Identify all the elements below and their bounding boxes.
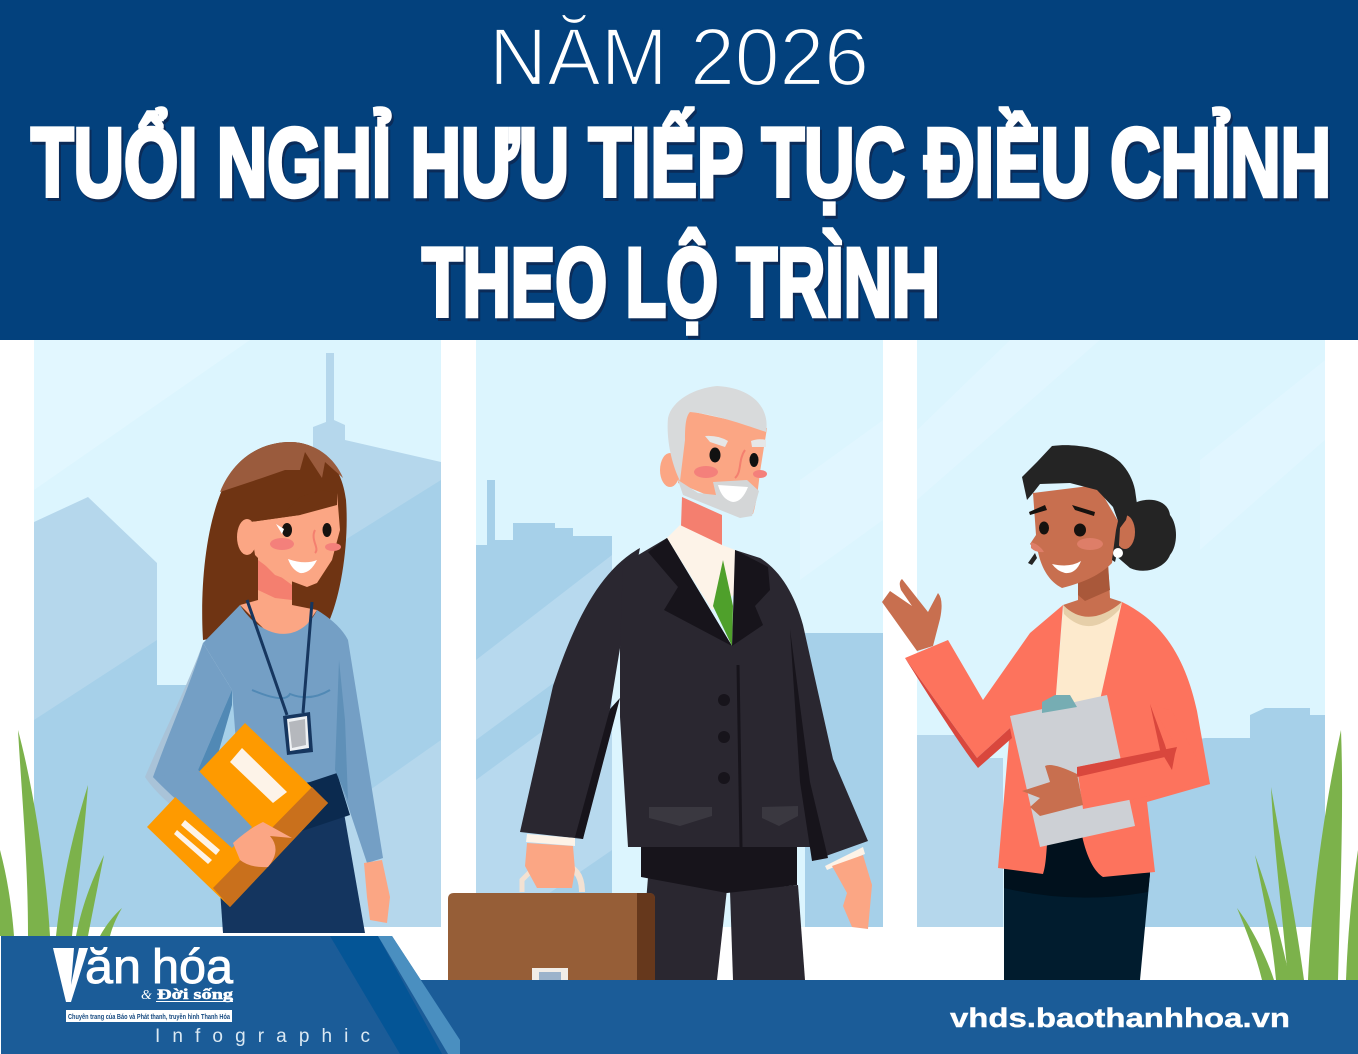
green tie (713, 560, 733, 646)
cream undershirt (1055, 602, 1122, 707)
jacket buttons (718, 694, 730, 784)
logo: Văn hóa & Đời sống: hóa (152, 941, 233, 994)
right hand (364, 860, 390, 923)
window: left with city skyline (34, 340, 441, 927)
logo: Văn hóa & Đời sống: & (141, 988, 152, 1003)
lapels (648, 538, 732, 646)
label: Infographic: Infographic (155, 1026, 370, 1047)
icon: clipboard (1010, 695, 1135, 847)
neck and face (240, 555, 317, 635)
logo tagline (66, 1010, 232, 1022)
character: woman with clipboard (882, 445, 1210, 980)
character: woman with folder (145, 442, 390, 933)
briefcase handle (522, 872, 530, 892)
darker diagonal band (330, 936, 442, 1054)
shirt collar (667, 525, 735, 610)
lanyard and badge (247, 600, 313, 755)
title line 2: THEO LỘ TRÌNH (422, 228, 940, 337)
lighter diagonal band (378, 936, 460, 1054)
grey beard (678, 480, 759, 518)
trousers (640, 877, 727, 980)
icon: orange folder (147, 723, 328, 907)
logo: Văn hóa & Đời sống: ăn (85, 941, 141, 994)
logo tagline: Chuyên trang của Báo và Phát thanh, truyền hình Thanh Hóa (68, 1012, 230, 1021)
logo: Văn hóa & Đời sống: Đời sống (157, 987, 234, 1003)
window: centre with city skyline (476, 340, 883, 927)
skirt (1004, 835, 1150, 980)
jacket seams (790, 629, 828, 861)
raised hand (882, 579, 942, 651)
jacket pockets (649, 806, 798, 826)
neck and head (680, 497, 722, 555)
icon: briefcase (448, 893, 655, 980)
plants: left (0, 730, 122, 936)
title banner (0, 0, 1358, 340)
website address: vhds.baothanhhoa.vn (950, 1003, 1290, 1033)
logo: Văn hóa & Đời sống (53, 941, 234, 1003)
plants: right (1237, 730, 1358, 980)
title line: year: NĂM 2026 (489, 12, 869, 103)
character: senior man in suit (448, 386, 872, 980)
left hand (525, 843, 575, 888)
suit jacket torso and right arm (620, 538, 868, 861)
hand over folder (233, 822, 292, 867)
hair bun (1115, 500, 1176, 571)
cuffs (526, 834, 865, 870)
right hand (832, 855, 872, 929)
hand on clipboard (1022, 765, 1083, 816)
skirt (220, 760, 365, 933)
logo panel (1, 936, 460, 1054)
coral jacket (905, 602, 1210, 877)
forearm (1077, 704, 1210, 809)
hair (202, 442, 347, 640)
grey hair (668, 386, 767, 481)
face (1030, 485, 1118, 588)
footer bar (400, 980, 1358, 1054)
blue top (203, 605, 383, 863)
neck and chest (1063, 560, 1122, 630)
window: right with city skyline (917, 340, 1325, 927)
curly hair (1022, 445, 1137, 562)
suit jacket left arm (520, 548, 640, 839)
